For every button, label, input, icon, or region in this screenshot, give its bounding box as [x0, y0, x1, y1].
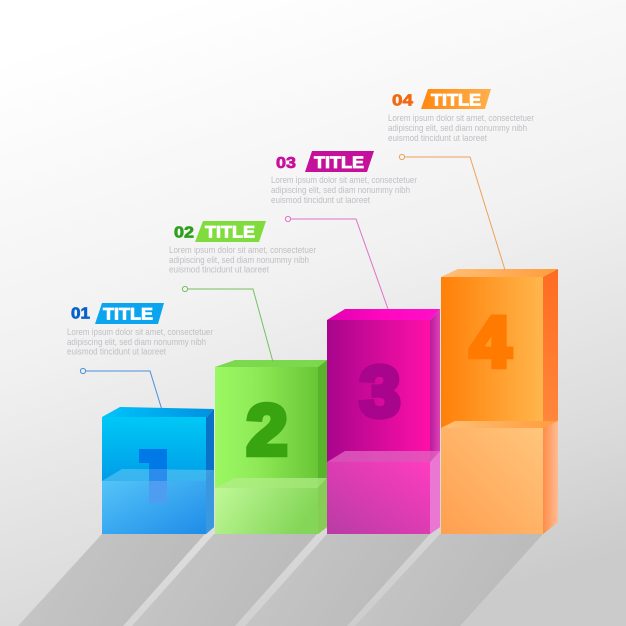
bar 4: orange [441, 269, 558, 534]
label block 04 [388, 89, 534, 143]
description 01: Lorem ipsum dolor sit amet, consectetuer [67, 327, 213, 337]
label block 03 [271, 151, 417, 205]
description 02: euismod tincidunt ut laoreet [169, 264, 270, 274]
title badge 02: TITLE [205, 224, 255, 242]
connector 1 [80, 368, 162, 410]
title badge 03 [305, 151, 374, 172]
number 1: 1 [138, 437, 168, 516]
bar 2: green [215, 360, 327, 534]
number 2: 2 [246, 392, 288, 470]
number 01: 01 [71, 306, 90, 322]
number 02: 02 [174, 224, 194, 242]
title badge 04 [421, 89, 491, 110]
label block 02 [169, 221, 316, 274]
number 04: 04 [392, 92, 413, 110]
description 03: adipiscing elit, sed diam nonummy nibh [271, 185, 410, 195]
title badge 01 [95, 303, 164, 324]
number 03: 03 [276, 155, 296, 172]
connector 2 [182, 286, 273, 362]
description 03: Lorem ipsum dolor sit amet, consectetuer [271, 175, 417, 185]
title badge 02 [195, 221, 266, 242]
floor shadows [18, 534, 543, 626]
description 04: adipiscing elit, sed diam nonummy nibh [388, 123, 527, 133]
description 02: Lorem ipsum dolor sit amet, consectetuer [169, 245, 316, 255]
title badge 04: TITLE [431, 92, 481, 110]
description 01 [67, 327, 213, 356]
description 04: euismod tincidunt ut laoreet [388, 133, 488, 143]
number 3: 3 [360, 353, 400, 432]
description 03: euismod tincidunt ut laoreet [271, 195, 371, 205]
title badge 03: TITLE [314, 154, 364, 172]
description 01: euismod tincidunt ut laoreet [67, 346, 167, 356]
number 4: 4 [470, 304, 512, 382]
connector 3 [285, 216, 388, 309]
label block 01 [67, 303, 213, 356]
description 02: adipiscing elit, sed diam nonummy nibh [169, 255, 309, 265]
description 02 [169, 245, 316, 274]
bar 3: magenta [327, 309, 440, 534]
description 03 [271, 175, 417, 205]
description 04 [388, 113, 534, 143]
description 04: Lorem ipsum dolor sit amet, consectetuer [388, 113, 534, 123]
description 01: adipiscing elit, sed diam nonummy nibh [67, 337, 206, 347]
title badge 01: TITLE [103, 306, 153, 324]
bar 1: blue [102, 407, 214, 534]
connector 4 [399, 154, 505, 270]
